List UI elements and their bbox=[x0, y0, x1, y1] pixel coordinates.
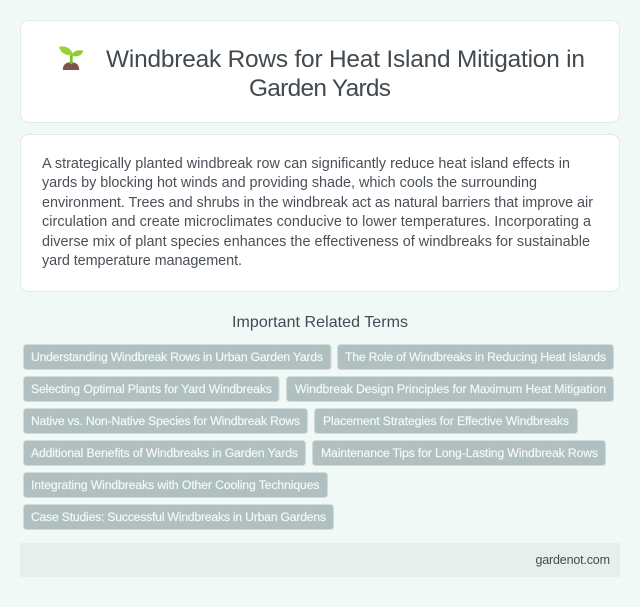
chip: additional benefits: Additional Benefits of Windbreaks in Garden Yards bbox=[31, 446, 298, 460]
title bbox=[106, 46, 585, 102]
chip: native vs non-native bbox=[24, 408, 308, 434]
chip: case studies bbox=[24, 504, 334, 530]
description text: circulation and create microclimates conducive to lower temperatures. Incorporating a bbox=[42, 214, 591, 230]
chip: design principles bbox=[286, 376, 614, 402]
chip: selecting optimal plants bbox=[24, 376, 279, 402]
chip: case studies: Case Studies: Successful Windbreaks in Urban Gardens bbox=[31, 510, 326, 524]
chip: integrating windbreaks: Integrating Windbreaks with Other Cooling Techniques bbox=[31, 478, 320, 492]
chip: maintenance tips bbox=[312, 440, 606, 466]
footer bar bbox=[20, 543, 620, 577]
chip: role of windbreaks bbox=[338, 344, 614, 370]
panel: description card bbox=[20, 134, 620, 292]
title: Garden Yards bbox=[249, 75, 391, 102]
chip: placement strategies: Placement Strategies for Effective Windbreaks bbox=[323, 414, 569, 428]
description text: yards by blocking hot winds and providing shade, which cools the surrounding bbox=[42, 175, 537, 191]
title: Windbreak Rows for Heat Island Mitigation in bbox=[106, 46, 585, 73]
chip: selecting optimal plants: Selecting Optimal Plants for Yard Windbreaks bbox=[31, 382, 272, 396]
footer source text: gardenot.com bbox=[536, 553, 610, 567]
chip: native vs non-native: Native vs. Non-Native Species for Windbreak Rows bbox=[31, 414, 300, 428]
chip: placement strategies bbox=[314, 408, 578, 434]
chip: understanding windbreak rows: Understanding Windbreak Rows in Urban Garden Yards bbox=[31, 350, 323, 364]
chip: role of windbreaks: The Role of Windbreaks in Reducing Heat Islands bbox=[345, 350, 606, 364]
heading: important related terms: Important Related Terms bbox=[232, 314, 408, 331]
icon: seedling bbox=[59, 46, 83, 70]
chip: maintenance tips: Maintenance Tips for Long-Lasting Windbreak Rows bbox=[321, 446, 598, 460]
description text: diverse mix of plant species enhances the effectiveness of windbreaks for sustainable bbox=[42, 234, 590, 250]
chip: understanding windbreak rows bbox=[24, 344, 331, 370]
description text: yard temperature management. bbox=[42, 253, 242, 269]
chip: integrating windbreaks bbox=[24, 472, 328, 498]
description text bbox=[42, 156, 593, 269]
description text: environment. Trees and shrubs in the windbreak act as natural barriers that improve air bbox=[42, 195, 593, 211]
chip: additional benefits bbox=[24, 440, 306, 466]
chip: design principles: Windbreak Design Principles for Maximum Heat Mitigation bbox=[295, 382, 606, 396]
panel: title card bbox=[20, 20, 620, 122]
description text: A strategically planted windbreak row can significantly reduce heat island effects in bbox=[42, 156, 570, 172]
panel: related terms chips bbox=[24, 344, 614, 530]
